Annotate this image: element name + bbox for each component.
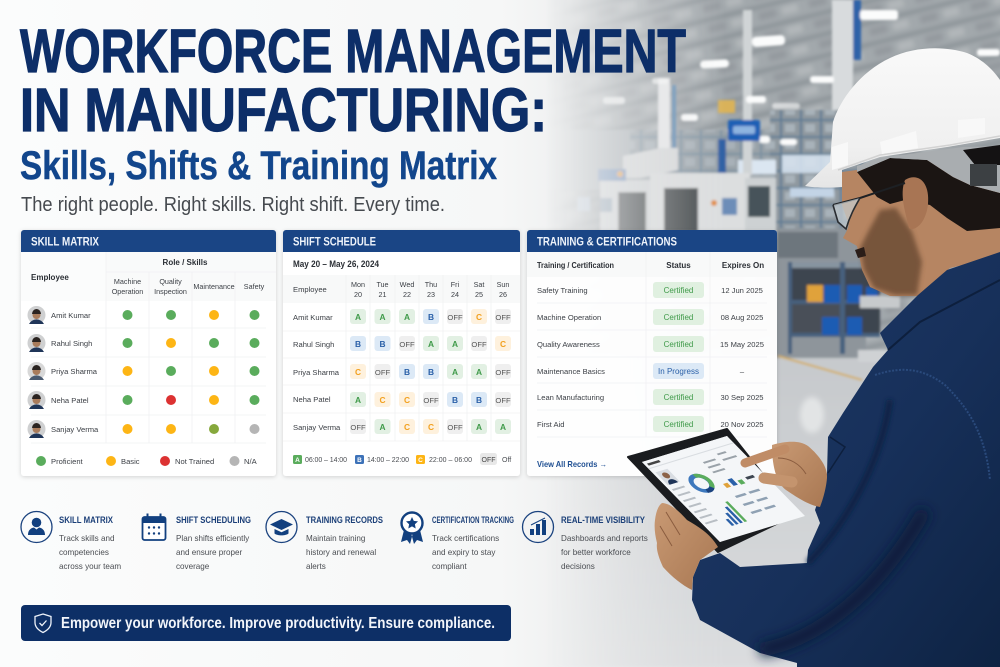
shift chips: A: [452, 339, 458, 349]
shift chips: OFF: [423, 396, 439, 405]
training rows: –: [740, 367, 745, 376]
hat harness: [857, 146, 1000, 193]
training rows: Certified: [664, 313, 693, 322]
link: view all records: View All Records →: [537, 460, 607, 469]
day headers: 24: [451, 290, 459, 299]
training rows: Maintenance Basics: [537, 367, 605, 376]
panel header: training: TRAINING & CERTIFICATIONS: [537, 236, 677, 248]
feature: shift scheduling: and ensure proper: [176, 548, 242, 557]
day headers: 26: [499, 290, 507, 299]
day headers: 20: [354, 290, 362, 299]
panel: shift schedule: [283, 230, 520, 476]
avatar: Priya Sharma: [28, 362, 46, 380]
banner: Empower your workforce. Improve productivity. Ensure compliance.: [61, 615, 495, 632]
employee names: Sanjay Verma: [293, 423, 341, 432]
feature: certification tracking: Track certifications: [432, 534, 499, 543]
employee names: Priya Sharma: [293, 368, 340, 377]
shift chips: B: [428, 367, 434, 377]
table headers: Quality: [159, 277, 182, 286]
day headers: Sun: [497, 280, 509, 289]
day headers: 21: [378, 290, 386, 299]
employee names: Neha Patel: [293, 395, 331, 404]
banner: [21, 605, 511, 641]
day headers: Tue: [376, 280, 389, 289]
shift chips: C: [500, 339, 506, 349]
shift chips: A: [428, 339, 434, 349]
hair: [857, 158, 1000, 231]
shift chips: A: [404, 312, 410, 322]
shift chips: OFF: [399, 340, 415, 349]
avatar: Rahul Singh: [28, 334, 46, 352]
right rack area: [776, 228, 866, 358]
shift chips: A: [476, 422, 482, 432]
training rows: Certified: [664, 286, 693, 295]
employee rows: [28, 306, 99, 438]
training table headers: Status: [666, 261, 691, 270]
shift chips: C: [404, 422, 410, 432]
avatar: Amit Kumar: [28, 306, 46, 324]
tablet dashboard: [642, 436, 805, 542]
avatar: Neha Patel: [28, 391, 46, 409]
training rows: In Progress: [658, 367, 699, 376]
table headers: Maintenance: [193, 282, 235, 291]
legend: shift codes: 14:00 – 22:00: [367, 457, 409, 464]
shift chips: C: [379, 395, 386, 405]
day headers: 23: [427, 290, 435, 299]
employee rows: Neha Patel: [51, 396, 89, 405]
icon: bar chart in circle: [522, 512, 554, 542]
feature: shift scheduling: Plan shifts efficiently: [176, 534, 250, 543]
legend: shift codes: [293, 453, 511, 465]
day headers: 22: [403, 290, 411, 299]
hard hat: [805, 48, 1000, 188]
shift chips: A: [355, 395, 361, 405]
day headers: 25: [475, 290, 483, 299]
legend: skill levels: Basic: [121, 457, 140, 466]
shift chips: OFF: [471, 340, 487, 349]
feature: training records: history and renewal: [306, 548, 376, 557]
shift chips: A: [500, 422, 506, 432]
subtitle: Skills, Shifts & Training Matrix: [20, 144, 497, 188]
shift chips: A: [476, 367, 482, 377]
icon: person in circle: [21, 512, 52, 542]
training table headers: Expires On: [722, 261, 764, 270]
icon: graduation cap: [266, 512, 297, 542]
employee rows: Priya Sharma: [51, 367, 98, 376]
legend: shift codes: 22:00 – 06:00: [429, 457, 472, 464]
legend: skill levels: N/A: [244, 457, 258, 466]
training rows: Certified: [664, 393, 693, 402]
shift chips: C: [355, 367, 361, 377]
employee rows: Sanjay Verma: [51, 425, 99, 434]
table headers: Operation: [112, 287, 143, 296]
shift chips: C: [404, 395, 410, 405]
feature: certification tracking: [401, 512, 514, 571]
training table headers: Training / Certification: [537, 261, 614, 270]
tablet: [628, 429, 805, 552]
worker figure: [628, 48, 1000, 667]
feature: real-time visibility: for better workforce: [561, 548, 631, 557]
icon: shield check: [35, 614, 51, 632]
training table headers: [537, 261, 764, 270]
feature: skill matrix: SKILL MATRIX: [59, 515, 113, 525]
training rows: 08 Aug 2025: [721, 313, 763, 322]
training rows: 15 May 2025: [720, 340, 764, 349]
legend: skill levels: [36, 456, 258, 466]
training rows: Quality Awareness: [537, 340, 600, 349]
shift chips: B: [379, 339, 386, 349]
panel header: training: [527, 230, 777, 252]
training rows: [537, 282, 764, 432]
feature: training records: TRAINING RECORDS: [306, 515, 383, 525]
date range: May 20 – May 26, 2024: [293, 259, 379, 269]
training rows: Certified: [664, 420, 693, 429]
shift chips: A: [452, 367, 458, 377]
title: WORKFORCE MANAGEMENT: [20, 17, 686, 85]
shift chips: B: [404, 367, 410, 377]
shift chips: A: [379, 422, 386, 432]
machines: [623, 148, 678, 178]
table headers: Employee: [31, 273, 69, 282]
shift chips: B: [476, 395, 482, 405]
legend: skill levels: Not Trained: [175, 457, 214, 466]
background photo: factory floor: [561, 0, 1000, 646]
shift chips: OFF: [495, 368, 511, 377]
shift chips: OFF: [350, 423, 366, 432]
feature: real-time visibility: decisions: [561, 562, 595, 571]
work shirt: [692, 252, 1000, 667]
lights: [603, 10, 1000, 145]
panel header: shift schedule: SHIFT SCHEDULE: [293, 236, 376, 248]
shift chips: A: [379, 312, 386, 322]
feature: certification tracking: and expiry to stay: [432, 548, 496, 557]
feature: real-time visibility: REAL-TIME VISIBILITY: [561, 515, 645, 525]
blue sign: [728, 120, 760, 141]
shift chips: OFF: [375, 368, 390, 377]
shirt folds: [760, 280, 1000, 650]
employee rows: Rahul Singh: [51, 339, 92, 348]
day headers: Thu: [425, 280, 437, 289]
feature: training records: alerts: [306, 562, 326, 571]
panel header: skill matrix: SKILL MATRIX: [31, 236, 99, 248]
training rows: 20 Nov 2025: [720, 420, 764, 429]
left hand: [655, 503, 718, 590]
icon: award rosette: [401, 512, 423, 544]
shift chips: [350, 309, 511, 434]
shift chips: B: [355, 339, 361, 349]
legend: shift codes: A: [295, 457, 300, 464]
employee names: Amit Kumar: [293, 313, 333, 322]
glasses: [833, 183, 905, 229]
feature: skill matrix: across your team: [59, 562, 121, 571]
shift chips: OFF: [447, 313, 463, 322]
right hand: [745, 442, 827, 507]
training rows: Safety Training: [537, 286, 588, 295]
shift chips: OFF: [447, 423, 463, 432]
day headers: Sat: [474, 280, 484, 289]
table headers: Inspection: [154, 287, 187, 296]
table headers: Role / Skills: [163, 258, 208, 267]
feature: certification tracking: CERTIFICATION TRACKING: [432, 515, 514, 525]
feature: shift scheduling: coverage: [176, 562, 210, 571]
training rows: 30 Sep 2025: [720, 393, 764, 402]
shift chips: C: [428, 422, 434, 432]
feature: skill matrix: Track skills and: [59, 534, 114, 543]
feature: skill matrix: competencies: [59, 548, 109, 557]
training rows: Lean Manufacturing: [537, 393, 604, 402]
title: [20, 17, 686, 144]
shift chips: C: [476, 312, 482, 322]
feature: shift scheduling: [142, 514, 251, 571]
employee names: Rahul Singh: [293, 340, 334, 349]
employee names: [293, 313, 341, 432]
legend: skill levels: Proficient: [51, 457, 84, 466]
day headers: Mon: [351, 280, 365, 289]
panel header: shift schedule: [283, 230, 520, 252]
icon: calendar: [142, 514, 166, 540]
shift chips: A: [355, 312, 361, 322]
table headers: Safety: [244, 282, 265, 291]
training rows: First Aid: [537, 420, 564, 429]
training rows: Certified: [664, 340, 693, 349]
shift chips: OFF: [495, 313, 511, 322]
shift chips: B: [452, 395, 458, 405]
shift chips: B: [428, 312, 434, 322]
ear: [903, 177, 928, 229]
panel header: skill matrix: [21, 230, 276, 252]
feature: real-time visibility: [522, 512, 648, 571]
legend: shift codes: Off: [502, 457, 511, 464]
feature: shift scheduling: SHIFT SCHEDULING: [176, 515, 251, 525]
legend: shift codes: B: [357, 457, 362, 464]
feature: certification tracking: compliant: [432, 562, 467, 571]
legend: shift codes: OFF: [482, 457, 496, 464]
title: IN MANUFACTURING:: [20, 76, 547, 144]
training rows: Machine Operation: [537, 313, 601, 322]
day headers: Fri: [451, 280, 460, 289]
feature: training records: [266, 512, 383, 571]
feature: skill matrix: [21, 512, 121, 571]
shift chips: OFF: [495, 396, 511, 405]
tagline: The right people. Right skills. Right shift. Every time.: [21, 194, 445, 216]
avatar: Sanjay Verma: [28, 420, 46, 438]
table headers: [31, 258, 265, 296]
employee rows: Amit Kumar: [51, 311, 91, 320]
skill level dots: [122, 310, 260, 434]
training rows: 12 Jun 2025: [721, 286, 763, 295]
legend: shift codes: 06:00 – 14:00: [305, 457, 347, 464]
day headers: Employee: [293, 285, 327, 294]
feature: real-time visibility: Dashboards and reports: [561, 534, 648, 543]
legend: shift codes: C: [418, 457, 423, 464]
panel: skill matrix: [21, 230, 276, 476]
feature: training records: Maintain training: [306, 534, 365, 543]
day headers: [293, 280, 509, 299]
face and neck: [842, 150, 1000, 296]
day headers: Wed: [400, 280, 414, 289]
table headers: Machine: [114, 277, 141, 286]
panel: training and certifications: [527, 230, 777, 476]
